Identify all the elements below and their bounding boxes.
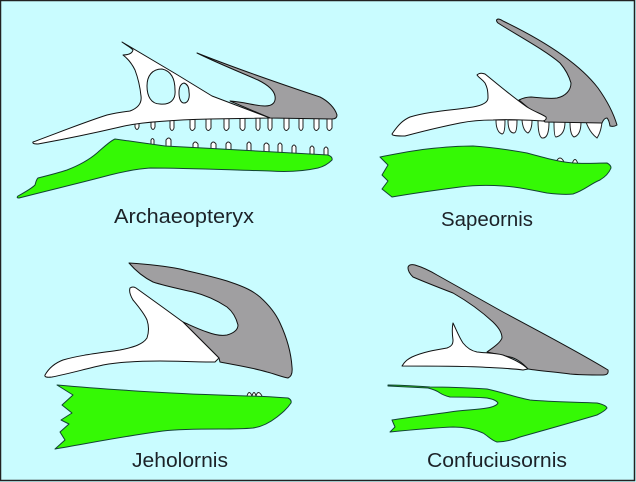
- panel: Sapeornis: [380, 19, 617, 231]
- premaxilla: [129, 263, 292, 378]
- upper teeth: [496, 120, 602, 138]
- maxilla: [33, 42, 270, 144]
- label: Confuciusornis: [427, 450, 567, 472]
- premaxilla: [197, 53, 337, 119]
- dentary: [55, 385, 291, 449]
- dentary: [388, 385, 607, 442]
- label: Archaeopteryx: [114, 206, 254, 228]
- maxilla: [45, 287, 219, 377]
- label: Jeholornis: [132, 450, 228, 472]
- teeth: [247, 392, 262, 396]
- lower teeth: [151, 138, 328, 157]
- upper teeth: [135, 116, 332, 130]
- label: Sapeornis: [441, 209, 533, 231]
- panel: Jeholornis: [45, 263, 292, 472]
- dentary: [17, 139, 332, 198]
- panel: Confuciusornis: [388, 265, 608, 472]
- premaxilla: [496, 19, 617, 126]
- panel: Archaeopteryx: [17, 42, 337, 228]
- lower teeth: [556, 158, 578, 164]
- maxilla: [392, 73, 546, 136]
- premaxilla: [408, 265, 608, 375]
- maxilla: [402, 323, 528, 370]
- dentary: [380, 146, 611, 197]
